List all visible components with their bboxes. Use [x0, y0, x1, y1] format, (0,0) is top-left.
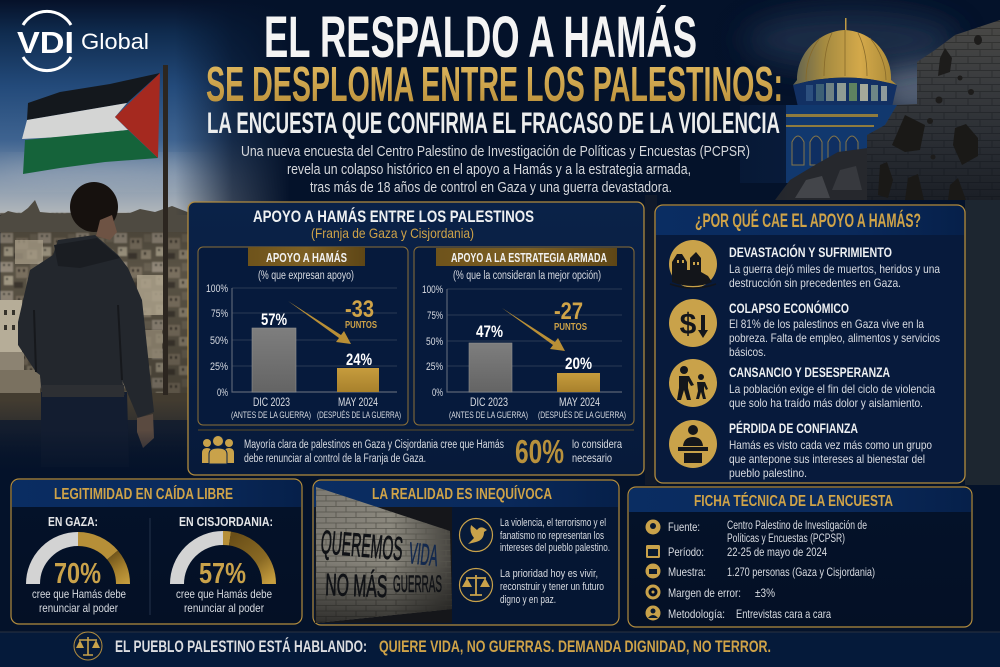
- chart: apoyo a Hamás: 25%: [210, 361, 228, 373]
- item: cansancio: que solo ha traído más dolor y aislamiento.: [729, 396, 923, 410]
- icon: dollar down: [669, 299, 717, 347]
- item: colapso económico: El 81% de los palestinos en Gaza vive en la: [729, 317, 924, 331]
- panel heading: APOYO A HAMÁS ENTRE LOS PALESTINOS: [253, 207, 534, 226]
- chart: apoyo a la estrategia armada: 20%: [565, 354, 592, 373]
- row: metodología: Entrevistas cara a cara: [736, 607, 831, 621]
- gauge: en Cisjordania 57%: EN CISJORDANIA:: [179, 514, 273, 529]
- intro text: [241, 143, 750, 196]
- row: margen de error: ±3%: [755, 586, 775, 600]
- logo: VDI Global: Global: [81, 29, 149, 54]
- title line 1: EL RESPALDO A HAMÁS: [264, 5, 697, 70]
- panel: ficha técnica: [628, 487, 972, 627]
- chart: apoyo a Hamás: 50%: [210, 335, 228, 347]
- callout: mayoría: Mayoría clara de palestinos en Gaza y Cisjordania cree que Hamás: [244, 439, 504, 451]
- item: devastación: [669, 240, 940, 290]
- chart: apoyo a la estrategia armada: 0%: [432, 387, 443, 399]
- chart: apoyo a la estrategia armada: 25%: [426, 361, 443, 373]
- row: metodología: [646, 606, 831, 621]
- row: período: [646, 545, 827, 559]
- icon: people: [202, 436, 234, 464]
- item: prioridad: La prioridad hoy es vivir,: [500, 568, 598, 580]
- panel: la realidad es inequívoca: GUERRAS: [393, 571, 442, 598]
- gauge: en Gaza 70%: [32, 514, 126, 615]
- intro text: revela un colapso histórico en el apoyo a Hamás y a la estrategia armada,: [287, 161, 691, 178]
- row: margen de error: Margen de error:: [668, 586, 741, 600]
- chart: apoyo a Hamás: [198, 247, 408, 425]
- chart: apoyo a la estrategia armada: PUNTOS: [554, 322, 587, 333]
- gauge: en Gaza 70%: 70%: [54, 558, 101, 590]
- chart: apoyo a la estrategia armada: (DESPUÉS DE LA GUERRA): [538, 410, 626, 421]
- ruined wall: [867, 20, 1000, 200]
- icon: scales: [460, 568, 492, 602]
- item: devastación: La guerra dejó miles de muertos, heridos y una: [729, 262, 940, 276]
- chart: apoyo a la estrategia armada: MAY 2024: [559, 395, 600, 409]
- icon: speaker at podium: [669, 420, 717, 468]
- panel: apoyo a Hamás: [188, 202, 644, 475]
- logo: VDI Global: [17, 11, 149, 71]
- chart: apoyo a Hamás: (ANTES DE LA GUERRA): [231, 410, 311, 421]
- row: fuente: Centro Palestino de Investigación de: [727, 520, 867, 532]
- panel: por qué cae el apoyo: [655, 205, 965, 483]
- photo: wall with graffiti: [316, 487, 452, 623]
- row: fuente: Políticas y Encuestas (PCPSR): [727, 533, 845, 545]
- gauge: en Gaza 70%: renunciar al poder: [39, 601, 118, 615]
- chart: apoyo a Hamás: MAY 2024: [338, 395, 378, 409]
- chart: apoyo a la estrategia armada: -27: [554, 298, 583, 325]
- chart: apoyo a Hamás: APOYO A HAMÁS: [266, 250, 347, 265]
- footer banner: [0, 632, 1000, 667]
- arrow: descenso: [288, 301, 351, 344]
- rubble: [775, 148, 880, 200]
- row: fuente: [646, 520, 867, 545]
- item: cansancio: La población exige el fin del ciclo de violencia: [729, 382, 935, 396]
- row: muestra: [646, 564, 875, 579]
- icon: city: [669, 240, 717, 288]
- intro text: Una nueva encuesta del Centro Palestino de Investigación de Políticas y Encuestas (PCPSR): [241, 143, 750, 160]
- panel heading: LEGITIMIDAD EN CAÍDA LIBRE: [54, 484, 233, 503]
- footer statement: EL PUEBLO PALESTINO ESTÁ HABLANDO:: [115, 637, 367, 656]
- item: violencia: [460, 517, 610, 554]
- chart: apoyo a Hamás: (DESPUÉS DE LA GUERRA): [317, 410, 401, 421]
- item: cansancio: CANSANCIO Y DESESPERANZA: [729, 364, 890, 380]
- item: devastación: destrucción sin precedentes en Gaza.: [729, 276, 901, 290]
- photo: wall with graffiti: NO MÁS: [325, 567, 388, 604]
- row: período: Período:: [668, 545, 704, 559]
- title: [206, 5, 783, 140]
- panel: la realidad es inequívoca: [313, 480, 619, 625]
- dome: [740, 18, 900, 183]
- icon: dollar down: $: [680, 308, 697, 341]
- man seen from behind: [18, 182, 154, 467]
- gauge: en Cisjordania 57%: [176, 514, 273, 615]
- chart: apoyo a Hamás: 75%: [211, 308, 228, 320]
- icon: dove: [460, 518, 492, 552]
- chart: apoyo a la estrategia armada: APOYO A LA ESTRATEGIA ARMADA: [451, 250, 607, 265]
- item: colapso económico: COLAPSO ECONÓMICO: [729, 299, 849, 316]
- chart: apoyo a Hamás: -33: [345, 296, 374, 323]
- callout: mayoría: [244, 433, 622, 470]
- chart: apoyo a la estrategia armada: 47%: [476, 322, 503, 341]
- icon: adult and child: [669, 359, 717, 407]
- item: devastación: DEVASTACIÓN Y SUFRIMIENTO: [729, 243, 892, 260]
- photo: Dome of the Rock and ruined wall: [645, 0, 1000, 485]
- photo: wall with graffiti: VIDA: [407, 537, 440, 573]
- flag pole: [163, 65, 168, 395]
- callout: mayoría: debe renunciar al control de la Franja de Gaza.: [244, 453, 426, 465]
- row: muestra: Muestra:: [668, 565, 706, 579]
- panel heading: FICHA TÉCNICA DE LA ENCUESTA: [694, 491, 893, 510]
- gauge: en Cisjordania 57%: 57%: [199, 558, 246, 590]
- item: colapso económico: pobreza. Falta de empleo, alimentos y servicios: [729, 331, 940, 345]
- chart: apoyo a Hamás: 24%: [346, 350, 372, 369]
- chart: apoyo a Hamás: 0%: [217, 387, 228, 399]
- panel: legitimidad en caída libre: [11, 479, 302, 624]
- item: pérdida de confianza: pueblo palestino.: [729, 466, 807, 480]
- chart: apoyo a la estrategia armada: (ANTES DE LA GUERRA): [449, 410, 528, 421]
- item: prioridad: [460, 568, 604, 606]
- photo: wall with graffiti: QUEREMOS: [319, 523, 404, 567]
- item: violencia: intereses del pueblo palestino.: [500, 542, 610, 554]
- arrow: descenso: [502, 308, 565, 351]
- panel subheading: (Franja de Gaza y Cisjordania): [311, 225, 474, 241]
- item: pérdida de confianza: Hamás es visto cada vez más como un grupo: [729, 438, 932, 452]
- gauge: en Cisjordania 57%: renunciar al poder: [184, 601, 264, 615]
- chart: apoyo a la estrategia armada: DIC 2023: [470, 395, 508, 409]
- row: período: 22-25 de mayo de 2024: [727, 545, 827, 559]
- row: muestra: 1.270 personas (Gaza y Cisjordania): [727, 565, 875, 579]
- item: colapso económico: [669, 299, 940, 359]
- chart: apoyo a la estrategia armada: 50%: [426, 336, 443, 348]
- gauge: en Gaza 70%: EN GAZA:: [48, 514, 98, 529]
- footer message: QUIERE VIDA, NO GUERRAS. DEMANDA DIGNIDAD, NO TERROR.: [379, 637, 771, 656]
- item: prioridad: reconstruir y tener un futuro: [500, 581, 604, 593]
- gauge: en Cisjordania 57%: cree que Hamás debe: [176, 587, 272, 601]
- item: cansancio: [669, 359, 935, 410]
- chart: apoyo a Hamás: (% que expresan apoyo): [258, 270, 354, 282]
- gauge: en Gaza 70%: cree que Hamás debe: [32, 587, 126, 601]
- item: pérdida de confianza: que antepone sus intereses al bienestar del: [729, 452, 925, 466]
- logo: VDI Global: VDI: [17, 25, 74, 60]
- item: colapso económico: básicos.: [729, 345, 766, 359]
- callout: mayoría: necesario: [572, 451, 612, 465]
- callout: mayoría: 60%: [515, 433, 564, 470]
- item: pérdida de confianza: [669, 420, 932, 480]
- Palestinian flag: [22, 73, 160, 174]
- row: fuente: Fuente:: [668, 520, 700, 534]
- chart: apoyo a Hamás: 57%: [261, 310, 287, 329]
- icon: scales: [74, 632, 102, 660]
- row: metodología: Metodología:: [668, 607, 725, 621]
- item: prioridad: digno y en paz.: [500, 594, 556, 606]
- chart: apoyo a Hamás: DIC 2023: [253, 395, 290, 409]
- chart: apoyo a la estrategia armada: 75%: [427, 310, 443, 322]
- chart: apoyo a Hamás: PUNTOS: [345, 320, 377, 331]
- chart: apoyo a la estrategia armada: 100%: [422, 284, 443, 296]
- chart: apoyo a la estrategia armada: [414, 247, 634, 425]
- photo: man looking at ruined city with Palestinian flag: [0, 0, 290, 480]
- chart: apoyo a Hamás: 100%: [206, 283, 228, 295]
- item: pérdida de confianza: PÉRDIDA DE CONFIANZA: [729, 420, 858, 436]
- item: violencia: fanatismo no representan los: [500, 530, 604, 542]
- chart: apoyo a la estrategia armada: (% que la consideran la mejor opción): [453, 270, 601, 282]
- callout: mayoría: lo considera: [572, 437, 622, 451]
- row: margen de error: [647, 586, 775, 600]
- intro text: tras más de 18 años de control en Gaza y una guerra devastadora.: [310, 179, 672, 196]
- item: violencia: La violencia, el terrorismo y el: [500, 517, 606, 529]
- panel heading: LA REALIDAD ES INEQUÍVOCA: [372, 484, 552, 503]
